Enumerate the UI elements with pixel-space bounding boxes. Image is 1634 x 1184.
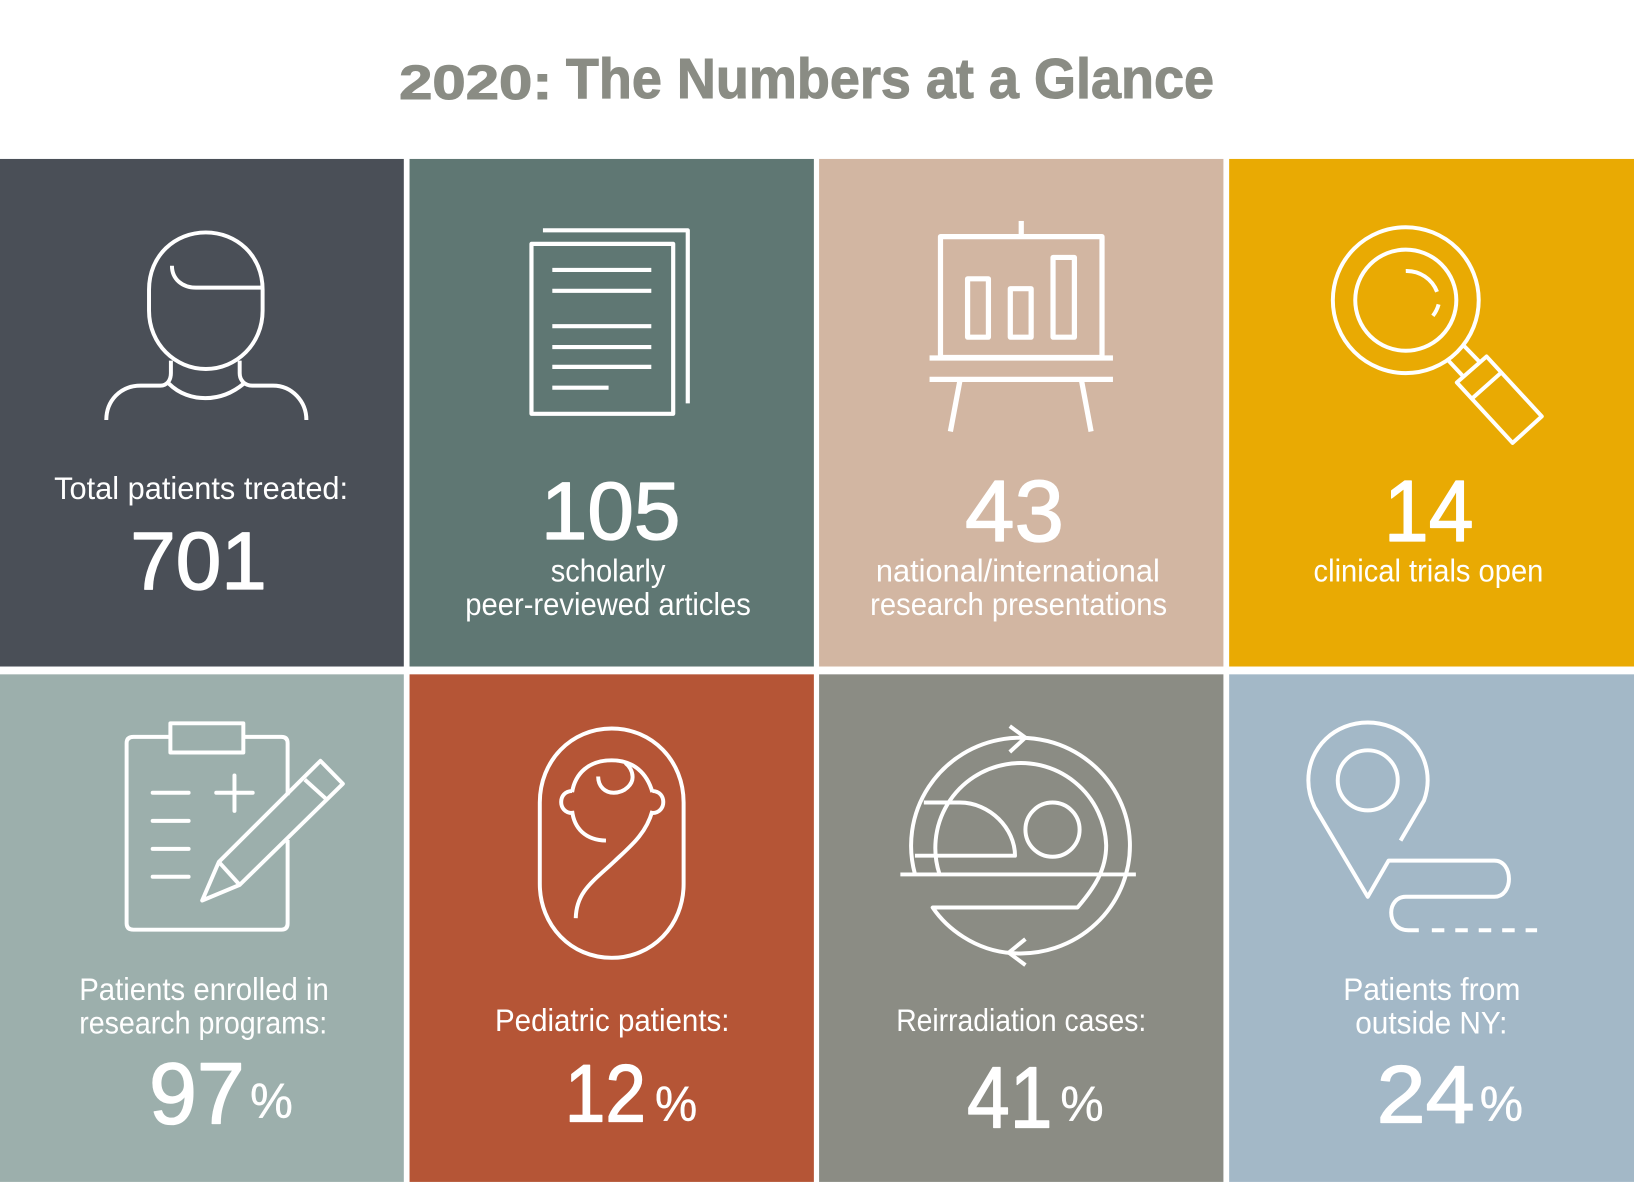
- title: The Numbers at a Glance: [566, 47, 1214, 110]
- icon: reirradiation cycle: [900, 726, 1136, 965]
- label: patients from outside NY: Patients from: [1343, 972, 1520, 1007]
- icon: clipboard with pencil: [127, 723, 343, 930]
- panel: research presentations: [819, 159, 1223, 667]
- number: 12 percent: [565, 1048, 697, 1139]
- label: patients enrolled in research programs: Patients enrolled in: [79, 972, 329, 1007]
- number: 105: 105: [541, 466, 680, 557]
- label: scholarly peer-reviewed articles: scholarly: [551, 554, 666, 589]
- panel: patients from outside NY: [1229, 674, 1634, 1182]
- number: 701: 701: [130, 516, 267, 607]
- label: national/international research presentations: [870, 554, 1167, 622]
- number: 24 percent: %: [1480, 1077, 1523, 1131]
- panel: clinical trials: [1229, 159, 1634, 667]
- label: scholarly peer-reviewed articles: peer-reviewed articles: [465, 587, 751, 622]
- panel: patients in research programs: [0, 674, 404, 1182]
- icon: magnifying glass: [1333, 227, 1542, 443]
- number: 24 percent: 24: [1377, 1050, 1475, 1141]
- label: reirradiation cases: Reirradiation cases:: [896, 1003, 1146, 1038]
- label: patients enrolled in research programs: research programs:: [79, 1005, 327, 1040]
- number: 12 percent: %: [655, 1077, 697, 1131]
- panel: pediatric patients: [410, 674, 814, 1182]
- panel: reirradiation cases: [819, 674, 1223, 1182]
- number: 14: 14: [1384, 462, 1474, 560]
- icon: map pin with route: [1308, 722, 1537, 930]
- icon: easel with bar chart: [930, 221, 1113, 431]
- number: 12 percent: 12: [565, 1048, 646, 1139]
- label: patients enrolled in research programs: [79, 972, 329, 1040]
- number: 41 percent: 41: [967, 1049, 1053, 1147]
- label: scholarly peer-reviewed articles: [465, 554, 751, 622]
- number: 24 percent: [1377, 1050, 1523, 1141]
- icon: swaddled baby: [540, 729, 684, 958]
- panel: total patients treated: [0, 159, 404, 667]
- label: national/international research presentations: research presentations: [870, 587, 1167, 622]
- label: patients from outside NY: [1343, 972, 1520, 1040]
- label: national/international research presentations: national/international: [876, 554, 1160, 589]
- number: 41 percent: %: [1060, 1077, 1104, 1131]
- number: 43: 43: [965, 462, 1064, 560]
- label: clinical trials open: clinical trials open: [1314, 554, 1543, 589]
- label: patients from outside NY: outside NY:: [1355, 1005, 1507, 1040]
- panel: scholarly articles: [410, 159, 814, 667]
- number: 97 percent: %: [250, 1074, 293, 1128]
- icon: stacked documents: [531, 230, 688, 414]
- icon: patient head and shoulders: [106, 232, 306, 420]
- label: pediatric patients: Pediatric patients:: [495, 1003, 729, 1038]
- number: 97 percent: 97: [149, 1045, 245, 1143]
- title: 2020:: [399, 57, 552, 110]
- number: 97 percent: [149, 1045, 293, 1143]
- label: total patients treated: Total patients treated:: [54, 471, 348, 506]
